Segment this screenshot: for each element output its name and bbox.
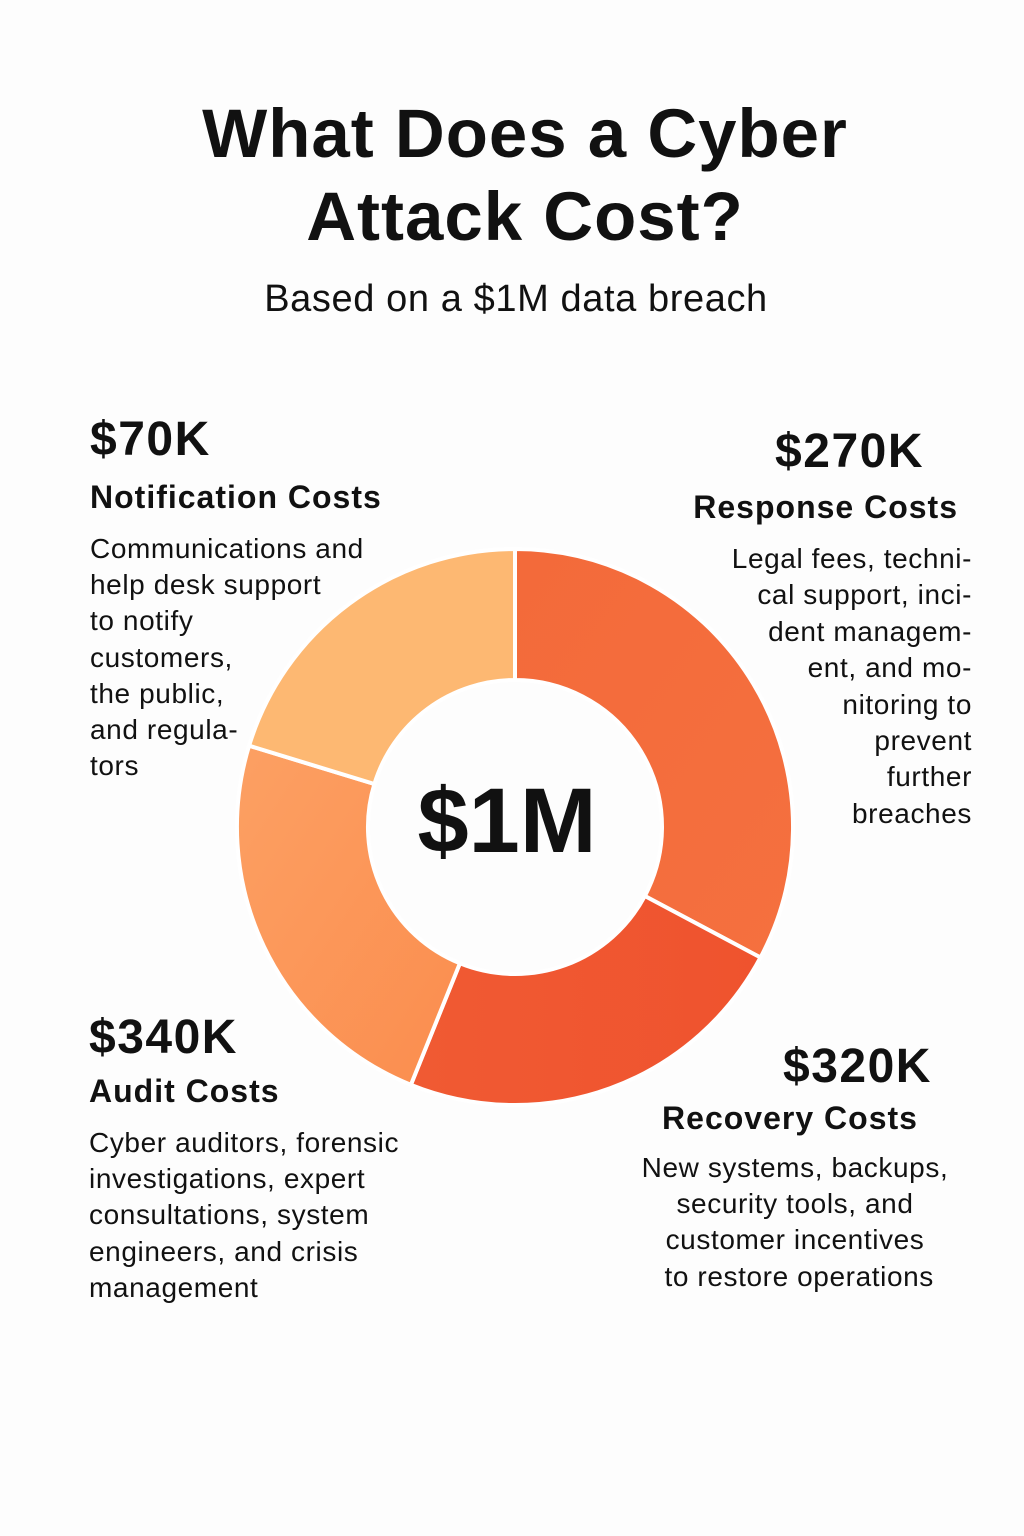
panel: recovery: Recovery Costs (662, 1100, 918, 1136)
panel: recovery: security tools, and (676, 1188, 914, 1219)
panel: notification: to notify (90, 605, 193, 636)
panel: response: $270K (775, 425, 924, 478)
subtitle: Based on a $1M data breach (264, 278, 768, 320)
panel: notification: Communications and (90, 533, 364, 564)
segment: response (515, 549, 793, 958)
panel: response (693, 425, 972, 829)
panel: audit: $340K (89, 1011, 238, 1064)
panel: response: dent managem- (768, 616, 972, 647)
panel: audit: engineers, and crisis (89, 1236, 358, 1267)
panel: response: cal support, inci- (757, 579, 972, 610)
panel: response: Response Costs (693, 489, 958, 525)
panel: response: nitoring to (842, 689, 972, 720)
panel: recovery: to restore operations (664, 1261, 934, 1292)
title (202, 95, 848, 255)
panel: notification: and regula- (90, 714, 238, 745)
panel: response: breaches (852, 798, 972, 829)
title: What Does a Cyber (202, 95, 848, 172)
panel: response: Legal fees, techni- (732, 543, 972, 574)
panel: notification: tors (90, 750, 139, 781)
panel: audit: Audit Costs (89, 1073, 280, 1109)
panel: notification: the public, (90, 678, 224, 709)
panel: recovery (642, 1040, 948, 1292)
segment: audit (237, 746, 460, 1085)
panel: recovery: New systems, backups, (642, 1152, 948, 1183)
panel: notification (90, 413, 382, 781)
title: Attack Cost? (306, 178, 744, 255)
panel: audit: management (89, 1272, 258, 1303)
segment: recovery (411, 896, 760, 1105)
panel: response: prevent (874, 725, 972, 756)
panel: response: ent, and mo- (808, 652, 972, 683)
panel: recovery: customer incentives (666, 1224, 924, 1255)
panel: recovery: $320K (783, 1040, 932, 1093)
center label: $1M (418, 770, 596, 872)
panel: response: further (887, 761, 972, 792)
panel: audit: consultations, system (89, 1199, 369, 1230)
panel: notification: $70K (90, 413, 211, 466)
panel: audit: investigations, expert (89, 1163, 365, 1194)
panel: audit (89, 1011, 399, 1303)
panel: notification: help desk support (90, 569, 321, 600)
segment: notification (249, 549, 515, 784)
panel: notification: Notification Costs (90, 479, 382, 515)
panel: audit: Cyber auditors, forensic (89, 1127, 399, 1158)
panel: notification: customers, (90, 642, 233, 673)
